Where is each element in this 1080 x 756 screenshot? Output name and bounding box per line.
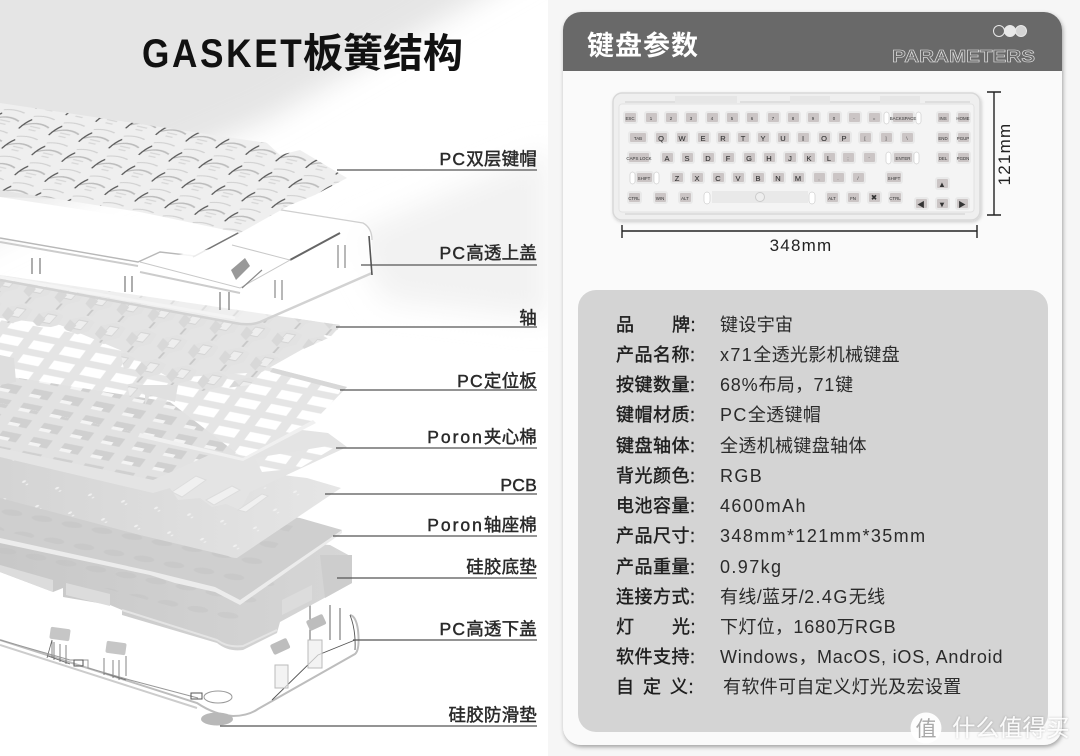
spec: software: Windows <box>720 647 799 667</box>
spec: lighting: 光: <box>672 617 696 637</box>
layer: poron switch foam <box>0 480 342 605</box>
dimension: height <box>987 92 1014 215</box>
spec: lighting: 灯 <box>616 617 634 637</box>
watermark: 值 <box>916 718 936 741</box>
keyboard photo: E <box>700 134 706 143</box>
keyboard photo: J <box>788 154 792 163</box>
label: PC top cover: PC高透上盖 <box>439 243 537 263</box>
keyboard photo: / <box>857 176 859 181</box>
keyboard photo: 7 <box>772 116 775 121</box>
layer: silicone foot <box>201 712 233 726</box>
keyboard photo: [ <box>864 136 866 141</box>
spec: lighting: 1680万RGB <box>793 617 896 637</box>
layer: bottom case <box>0 560 359 716</box>
keyboard photo: T <box>741 134 746 143</box>
keyboard photo: D <box>705 154 711 163</box>
spec: weight: 产品重量: <box>616 557 696 577</box>
keyboard photo: 1 <box>650 116 653 121</box>
label: Poron sandwich foam: Poron夹心棉 <box>427 427 537 447</box>
spec: brand: 键设宇宙 <box>720 315 793 335</box>
keyboard photo: 3 <box>690 116 693 121</box>
keyboard photo: 8 <box>792 116 795 121</box>
keyboard photo: Q <box>658 134 664 143</box>
spec: product name: 产品名称: <box>616 345 696 365</box>
spec: size: 产品尺寸: <box>616 526 696 546</box>
spec: lighting: 下灯位， <box>720 617 793 637</box>
spec: customization: 定 <box>643 677 662 697</box>
spec: customization: 有软件可自定义灯光及宏设置 <box>723 677 962 697</box>
keyboard photo: , <box>818 176 820 181</box>
leader lines <box>220 170 537 726</box>
spec: brand: 品 <box>616 315 634 335</box>
keyboard photo: CAPS LOCK <box>626 156 652 161</box>
spec: customization: 义: <box>670 677 694 697</box>
keyboard photo: O <box>821 134 827 143</box>
keyboard photo: 6 <box>751 116 754 121</box>
keyboard photo: CTRL <box>889 196 901 201</box>
layer: poron sandwich foam <box>0 395 347 512</box>
label: silicone feet: 硅胶防滑垫 <box>448 705 537 725</box>
keyboard photo: - <box>853 116 855 121</box>
keyboard photo: I <box>802 134 804 143</box>
keyboard photo: WIN <box>656 196 664 201</box>
keyboard photo: HOME <box>956 116 970 121</box>
title: GASKET <box>142 31 304 75</box>
label: PC keycaps: PC双层键帽 <box>439 149 537 169</box>
keyboard photo: ALT <box>828 196 836 201</box>
keyboard photo: 5 <box>731 116 734 121</box>
keyboard photo: = <box>873 116 876 121</box>
keyboard photo: W <box>678 134 686 143</box>
label: PC plate: PC定位板 <box>457 371 537 391</box>
panel: gasket structure <box>0 0 578 756</box>
spec: product name: 全透光影机械键盘 <box>753 345 900 365</box>
spec: battery: 电池容量: <box>616 496 696 516</box>
spec: connection: 2.4G无线 <box>804 587 885 607</box>
dimension: width <box>622 225 977 255</box>
keyboard photo: ALT <box>681 196 689 201</box>
keyboard photo: N <box>775 174 781 183</box>
keyboard photo: CTRL <box>628 196 640 201</box>
spec: battery: 4600mAh <box>720 496 807 516</box>
keyboard photo: FN <box>850 196 856 201</box>
keyboard photo: U <box>780 134 786 143</box>
keyboard photo: Y <box>760 134 766 143</box>
keyboard photo: TAB <box>634 136 642 141</box>
keyboard photo: PGDN <box>957 156 969 161</box>
title: 板簧结构 <box>303 32 463 76</box>
icon: three circles <box>994 26 1026 36</box>
keyboard photo: M <box>795 174 801 183</box>
panel: spec table <box>578 290 1048 732</box>
keyboard photo <box>613 93 980 220</box>
keyboard photo: 9 <box>812 116 815 121</box>
layer: keycaps <box>0 103 347 233</box>
keyboard photo: ✖ <box>871 193 878 202</box>
keyboard photo: H <box>766 154 772 163</box>
layer: silicone bottom pad <box>0 520 352 650</box>
spec: keycap material: PC <box>720 405 748 425</box>
keyboard photo: 2 <box>670 116 673 121</box>
keyboard photo: G <box>746 154 752 163</box>
layer: PC plate <box>0 320 347 461</box>
keyboard photo: \ <box>906 136 908 141</box>
keyboard photo: X <box>694 174 700 183</box>
keyboard photo: ' <box>869 156 870 161</box>
title <box>142 31 463 76</box>
keyboard photo: ◀ <box>917 200 925 209</box>
spec: keycap material: 全透键帽 <box>748 405 821 425</box>
keyboard photo: K <box>806 154 812 163</box>
watermark: 什么值得买 <box>952 715 1070 741</box>
watermark <box>910 712 1070 744</box>
layer: PC top cover <box>0 197 372 324</box>
keyboard photo: R <box>720 134 726 143</box>
spec: connection: 有线/蓝牙/ <box>720 587 804 607</box>
dimension: height: 121mm <box>995 123 1014 185</box>
keyboard photo: DEL <box>939 156 948 161</box>
keyboard photo: INS <box>939 116 947 121</box>
spec: customization: 自 <box>616 677 634 697</box>
panel: parameters background <box>548 0 1080 756</box>
keyboard photo: 4 <box>711 116 714 121</box>
keyboard photo: P <box>841 134 847 143</box>
layer: switches <box>0 275 340 405</box>
keyboard photo: ▶ <box>958 200 966 209</box>
label: PC bottom cover: PC高透下盖 <box>439 619 537 639</box>
keyboard photo: ] <box>885 136 887 141</box>
keyboard photo: ▼ <box>938 200 946 209</box>
keyboard photo: ; <box>847 156 849 161</box>
keyboard photo: V <box>735 174 741 183</box>
spec: key count: 布局，71键 <box>758 375 853 395</box>
spec: keycap material: 键帽材质: <box>616 405 696 425</box>
keyboard photo: ESC <box>625 116 635 121</box>
keyboard photo: 0 <box>833 116 836 121</box>
spec: switches: 全透机械键盘轴体 <box>720 436 867 456</box>
keyboard photo: BACKSPACE <box>890 116 916 121</box>
spec: brand: 牌: <box>672 315 696 335</box>
layer: PCB <box>0 440 341 558</box>
keyboard photo: ▲ <box>938 180 946 189</box>
keyboard photo: F <box>726 154 731 163</box>
panel: parameters card <box>563 12 1062 745</box>
spec: switches: 键盘轴体: <box>616 436 696 456</box>
keyboard photo: Z <box>675 174 680 183</box>
english heading: PARAMETERS <box>892 46 1035 66</box>
spec: backlight: 背光颜色: <box>616 466 696 486</box>
keyboard photo: SHIFT <box>638 176 651 181</box>
spec: connection: 连接方式: <box>616 587 696 607</box>
heading: 键盘参数 <box>587 31 699 61</box>
keyboard photo: A <box>664 154 670 163</box>
spec: key count: 按键数量: <box>616 375 696 395</box>
keyboard photo: PGUP <box>957 136 969 141</box>
spec: backlight: RGB <box>720 466 763 486</box>
spec: size: 348mm*121mm*35mm <box>720 526 926 546</box>
dimension: width: 348mm <box>770 236 832 255</box>
label: Poron switch foam: Poron轴座棉 <box>427 515 537 535</box>
spec: key count: 68% <box>720 375 758 395</box>
keyboard photo: B <box>755 174 761 183</box>
spec: software: ，MacOS, iOS, Android <box>799 647 1003 667</box>
keyboard photo: C <box>715 174 721 183</box>
label: PCB: PCB <box>500 475 537 495</box>
keyboard photo: S <box>684 154 690 163</box>
keyboard photo: END <box>938 136 948 141</box>
keyboard photo: . <box>837 176 839 181</box>
keyboard photo: L <box>827 154 831 163</box>
spec: weight: 0.97kg <box>720 557 782 577</box>
spec: product name: x71 <box>720 345 753 365</box>
spec: software: 软件支持: <box>616 647 696 667</box>
label: silicone pad: 硅胶底垫 <box>466 557 537 577</box>
label: switch: 轴 <box>519 308 537 328</box>
header band <box>563 12 1062 71</box>
keyboard photo: ENTER <box>896 156 910 161</box>
keyboard photo: SHIFT <box>888 176 901 181</box>
